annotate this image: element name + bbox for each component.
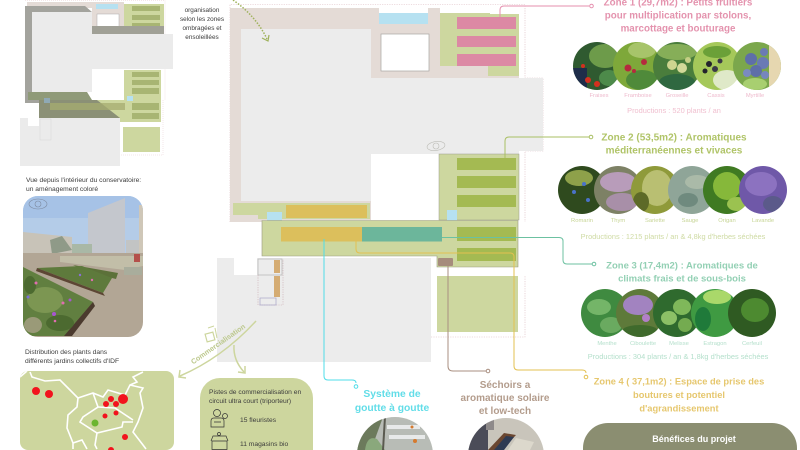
- beds zone 2: [457, 158, 516, 207]
- zone 1 captions: Framboise: [624, 93, 652, 99]
- panel: circuit court: [200, 378, 313, 450]
- panel: circuit court: circuit ultra court (triporteur): [209, 398, 291, 405]
- zone 2 captions: Romarin: [571, 218, 593, 224]
- zone 3 heading: climats frais et de sous-bois: [618, 274, 746, 284]
- main garden plan: [217, 4, 543, 362]
- zone 2 captions: Lavande: [752, 218, 774, 224]
- zone 3 captions: Ciboulette: [630, 341, 656, 347]
- zone 3 and yellow beds: [281, 227, 442, 242]
- heading: dryers: [461, 380, 550, 417]
- zone 2 photos: [558, 166, 787, 214]
- heading: drip: [355, 389, 429, 414]
- photo: solar dryer: [468, 418, 544, 450]
- zone 3 production: Productions : 304 plants / an & 1,8kg d'herbes séchées: [588, 352, 769, 361]
- zone 2 heading: [601, 132, 747, 156]
- zone 4 heading: Zone 4 ( 37,1m2) : Espace de prise des: [594, 376, 764, 386]
- zone 3 captions: Menthe: [597, 341, 617, 347]
- caption: view: Vue depuis l'intérieur du conservatoire:: [26, 177, 141, 184]
- zone 1 captions: Fraises: [589, 93, 609, 99]
- zone 1 production: Productions : 520 plants / an: [627, 106, 721, 115]
- icon: florist: [211, 410, 228, 427]
- icon: organic shop: [211, 432, 228, 450]
- panel: benefits: [583, 423, 797, 450]
- text: organisation: selon les zones: [180, 16, 224, 23]
- zone 1 captions: Myrtille: [746, 93, 764, 99]
- text: organisation: ensoleillées: [185, 34, 219, 41]
- photo: conservatory view: [23, 196, 143, 337]
- zone 2 heading: méditerranéennes et vivaces: [606, 146, 743, 156]
- zone 1 captions: Groseille: [666, 93, 688, 99]
- zone 3 captions: Estragon: [703, 341, 727, 347]
- zone 3 heading: [606, 260, 758, 284]
- zone 2 captions: Sariette: [645, 218, 665, 224]
- panel: benefits: Bénéfices du projet: [652, 434, 736, 444]
- caption: view: [26, 177, 141, 193]
- panel: circuit court: 11 magasins bio: [240, 441, 288, 448]
- zone 2 captions: Thym: [611, 218, 625, 224]
- zone 3 captions: [597, 341, 762, 347]
- zone 1 captions: [589, 93, 764, 99]
- caption: view: un aménagement coloré: [26, 186, 98, 193]
- zone 3 captions: Cerfeuil: [742, 341, 762, 347]
- zone 2 production: Productions : 1215 plants / an & 4,8kg d'herbes séchées: [581, 232, 766, 241]
- zone 2 captions: Origan: [718, 218, 736, 224]
- zone 4: [437, 276, 518, 332]
- commercialisation arrows: [179, 321, 256, 378]
- commercialisation label: Commercialisation: [189, 322, 247, 366]
- heading: dryers: Séchoirs a: [480, 380, 531, 391]
- eye icon: [426, 140, 446, 152]
- zone 4 heading: [594, 376, 764, 414]
- panel: circuit court: 15 fleuristes: [240, 417, 277, 424]
- dotted arrow: [233, 0, 269, 41]
- zone 3 photos: [581, 289, 776, 337]
- text: organisation: [180, 7, 224, 41]
- text: organisation: organisation: [185, 7, 220, 14]
- small shade plan: [20, 0, 173, 166]
- zone 1 photos: [573, 42, 781, 90]
- zone 2 heading: Zone 2 (53,5m2) : Aromatiques: [601, 132, 747, 144]
- caption: distribution: Distribution des plants dans: [25, 349, 108, 356]
- zone 1 heading: pour multiplication par stolons,: [605, 10, 751, 22]
- zone 4 heading: d'agrandissement: [639, 404, 719, 414]
- caption: distribution: différents jardins collectifs d'IDF: [25, 358, 119, 365]
- photo: drip irrigation: [357, 417, 433, 450]
- zone 2 captions: [571, 218, 774, 224]
- caption: distribution: [25, 349, 119, 365]
- zone 3 captions: Melisse: [669, 341, 689, 347]
- heading: drip: Système de: [363, 389, 421, 400]
- zone 1 heading: [604, 0, 753, 34]
- heading: dryers: et low-tech: [479, 406, 531, 417]
- panel: circuit court: Pistes de commercialisation en: [209, 389, 301, 396]
- zone 3 heading: Zone 3 (17,4m2) : Aromatiques de: [606, 260, 758, 272]
- connector lines: [324, 4, 596, 388]
- zone 2 captions: Sauge: [682, 218, 698, 224]
- zone 4 heading: boutures et potentiel: [633, 390, 725, 400]
- zone 1 captions: Cassis: [707, 93, 725, 99]
- eye icon on photo: [29, 199, 47, 209]
- beds zone 1: [457, 17, 516, 66]
- map of Île-de-France: [20, 371, 174, 450]
- heading: dryers: aromatique solaire: [461, 393, 550, 404]
- text: organisation: ombragées et: [182, 25, 222, 32]
- zone 1 heading: marcottage et bouturage: [621, 24, 736, 34]
- heading: drip: goutte à goutte: [355, 403, 429, 414]
